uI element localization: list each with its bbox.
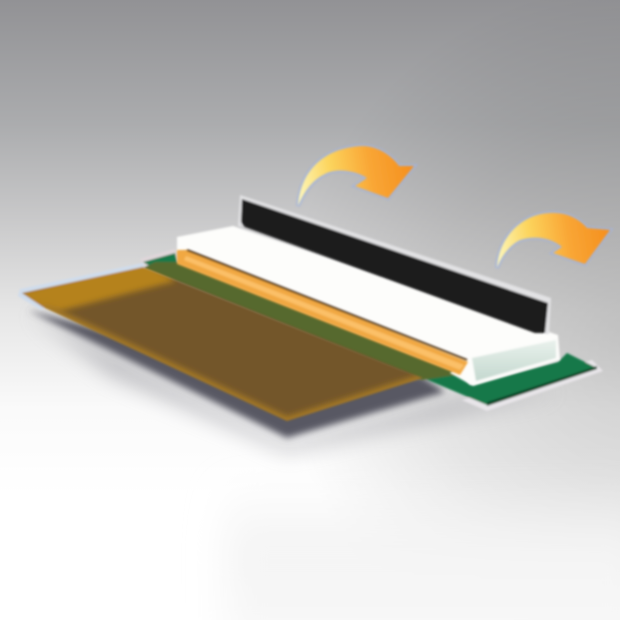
white connector housing	[177, 226, 560, 386]
arrow: right flip direction	[497, 213, 610, 268]
board left end	[143, 253, 178, 266]
housing end face	[472, 340, 556, 381]
arrow: left flip direction	[298, 146, 414, 206]
film pale edge	[18, 263, 145, 310]
green circuit board	[140, 249, 603, 411]
dark gap line	[187, 250, 467, 360]
flexible printed circuit film	[14, 260, 423, 421]
black flip-up actuator	[238, 195, 551, 334]
film lit lower edge	[43, 307, 423, 421]
drop shadow	[28, 310, 560, 452]
actuator halo	[238, 195, 551, 334]
board dark lower edge	[487, 366, 597, 406]
film lit tip	[23, 266, 176, 312]
board strip beneath film	[143, 262, 462, 380]
board halo	[462, 360, 603, 411]
board right end	[423, 353, 597, 405]
orange contact strip	[177, 250, 468, 375]
